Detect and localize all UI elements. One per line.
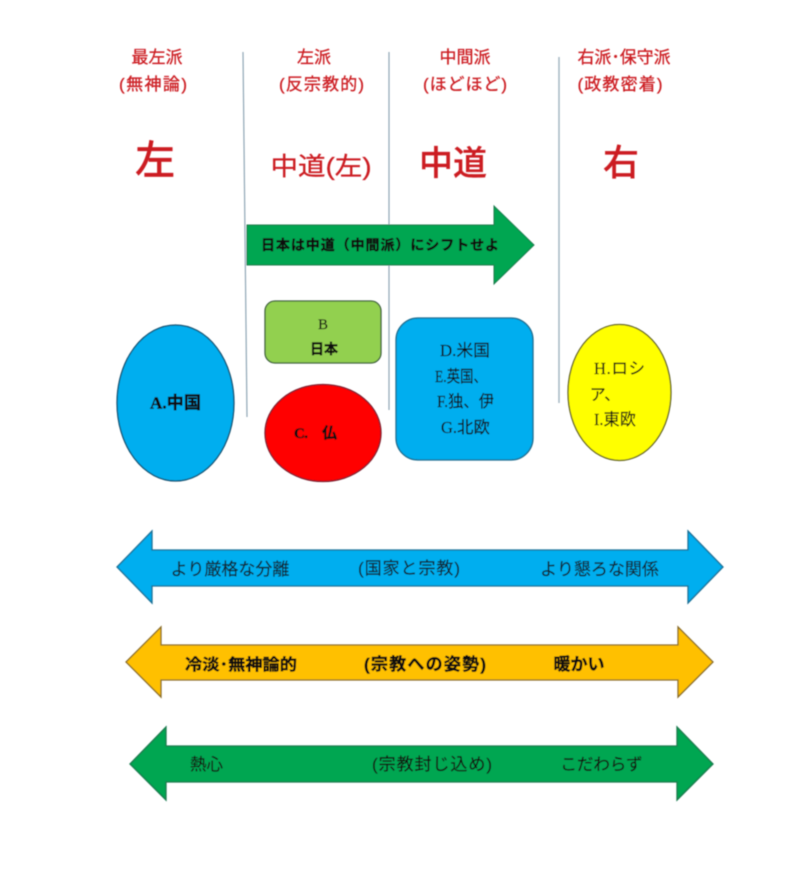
double arrow: state and religion	[117, 531, 723, 603]
column header: centrist	[423, 48, 507, 94]
double arrow: attitude to religion: (宗教への姿勢)	[364, 655, 486, 674]
box: D to G USA and Europe: F.独、伊	[437, 392, 494, 411]
double arrow: containing religion: こだわらず	[560, 755, 643, 774]
box: D to G USA and Europe: E.英国、	[435, 367, 487, 386]
heading: right: 右	[603, 142, 639, 183]
arrow: shift Japan to the centre: 日本は中道（中間派）にシフトせよ	[261, 237, 499, 253]
column header: far left	[119, 48, 187, 94]
double arrow: state and religion: より厳格な分離	[171, 560, 289, 579]
double arrow: attitude to religion	[126, 627, 713, 697]
box: B Japan	[265, 301, 381, 363]
double arrow: containing religion: 熱心	[190, 755, 224, 774]
column header: right	[578, 48, 670, 94]
column header: left: (反宗教的)	[279, 75, 364, 94]
ellipse: H Russia, I Eastern Europe: I.東欧	[594, 410, 636, 429]
column header: centrist: 中間派	[440, 48, 490, 67]
box: D to G USA and Europe: G.北欧	[441, 418, 490, 437]
ellipse: H Russia, I Eastern Europe: ア、	[590, 387, 620, 404]
heading: center: 中道	[419, 145, 487, 183]
column header: left: 左派	[297, 48, 331, 67]
box: D to G USA and Europe: D.米国	[440, 341, 490, 360]
box: B Japan: B	[318, 317, 328, 333]
double arrow: attitude to religion: 冷淡･無神論的	[185, 656, 297, 674]
double arrow: state and religion: より懇ろな関係	[540, 560, 659, 579]
column header: left	[279, 48, 364, 94]
box: B Japan: 日本	[310, 341, 338, 357]
column header: right: (政教密着)	[578, 75, 662, 94]
box: D to G USA and Europe	[396, 318, 533, 460]
double arrow: containing religion: (宗教封じ込め)	[372, 755, 492, 774]
column header: far left: (無神論)	[119, 75, 187, 94]
arrow: shift Japan to the centre	[247, 206, 534, 284]
double arrow: attitude to religion: 暖かい	[554, 655, 604, 674]
double arrow: containing religion	[130, 727, 713, 800]
ellipse: H Russia, I Eastern Europe: H.ロシ	[594, 359, 645, 378]
heading: center left: 中道(左)	[270, 153, 372, 181]
column header: far left: 最左派	[132, 48, 182, 67]
ellipse: C France: C. 仏	[294, 425, 337, 442]
column header: centrist: (ほどほど)	[423, 75, 507, 94]
ellipse: A China	[117, 325, 234, 481]
ellipse: A China: A.中国	[150, 394, 201, 412]
double arrow: state and religion: (国家と宗教)	[358, 559, 460, 578]
heading: left: 左	[135, 139, 175, 183]
ellipse: C France	[265, 384, 381, 482]
ellipse: H Russia, I Eastern Europe	[568, 324, 671, 460]
column header: right: 右派･保守派	[578, 48, 670, 67]
